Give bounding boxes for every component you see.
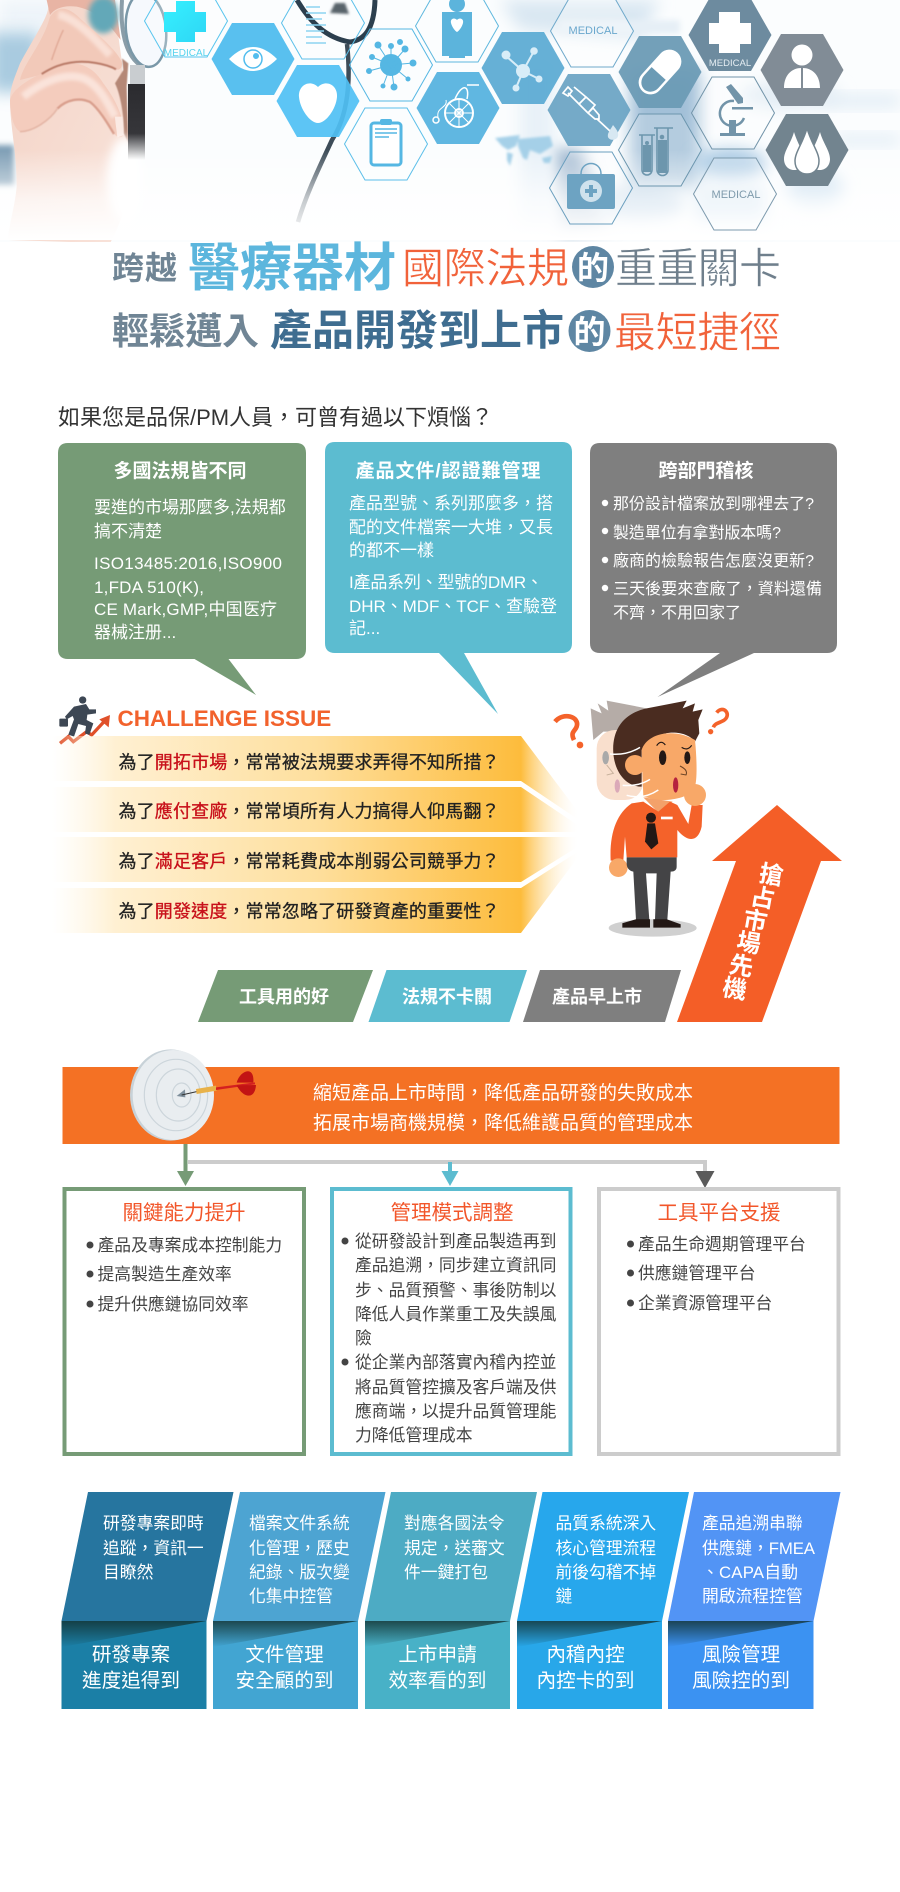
section heading: worries: 如果您是品保/PM人員，可曾有過以下煩惱？: [58, 405, 493, 430]
panel: internal audit column: 前後勾稽不掉: [556, 1563, 656, 1582]
banner: customers: [52, 837, 579, 882]
panel: risk management column: 供應鏈，FMEA: [702, 1538, 816, 1558]
banner: audit: [52, 787, 579, 832]
panel: document management column: 安全顧的到: [236, 1670, 333, 1692]
panel: market submission column: 上市申請: [398, 1644, 477, 1666]
panel: document management column: 化集中控管: [249, 1587, 333, 1606]
hexagon: medical outline: MEDICAL: [569, 25, 617, 37]
panel: project progress column: 目瞭然: [103, 1563, 154, 1582]
hexagon: molecule: [482, 32, 564, 104]
panel: speech bubble documents: DHR、MDF、TCF、查驗登: [349, 597, 557, 616]
panel: internal audit column: 內稽內控: [546, 1644, 625, 1666]
hexagon: drops: [766, 114, 848, 186]
title line 2: 輕鬆邁入: [112, 311, 259, 352]
panel: risk management column: 、CAPA自動: [702, 1563, 798, 1582]
panel: management mode: 將品質管控擴及客戶端及供: [355, 1378, 557, 1397]
panel: speech bubble documents: 產品文件/認證難管理: [356, 459, 540, 482]
arrow: capture market first: 搶占市場先機: [720, 859, 785, 1005]
title line 1: 國際法規: [402, 245, 569, 292]
panel: management mode: 降低人員作業重工及失誤風: [355, 1305, 557, 1324]
heading: challenge issue: CHALLENGE ISSUE: [118, 706, 331, 731]
panel: project progress column: 研發專案即時: [103, 1514, 204, 1533]
panel: internal audit column: 鏈: [556, 1587, 572, 1606]
panel: management mode: [332, 1189, 570, 1454]
hexagon icon cluster: [144, 0, 848, 230]
panel: speech bubble regulations: 要進的市場那麼多,法規都: [94, 498, 286, 517]
tag: good tools: [198, 970, 373, 1022]
panel: speech bubble regulations: 器械注册...: [94, 623, 176, 642]
panel: key capabilities: 產品及專案成本控制能力: [98, 1236, 282, 1255]
arrow: to capability box: [177, 1144, 194, 1186]
panel: speech bubble regulations: 多國法規皆不同: [113, 460, 247, 482]
panel: speech bubble documents: [325, 442, 572, 714]
panel: management mode: 應商端，以提升品質管理能: [355, 1401, 557, 1421]
hexagon: medical cross outline: [144, 0, 228, 59]
hexagon: syringe: [548, 74, 630, 146]
panel: key capabilities: [64, 1189, 304, 1454]
panel: market submission column: 對應各國法令: [404, 1513, 505, 1533]
panel: key capabilities: 關鍵能力提升: [122, 1202, 246, 1224]
hexagon: wheelchair: [416, 72, 500, 144]
hero bottom fade: [0, 150, 900, 240]
hexagon: test tubes: [618, 114, 702, 186]
panel: speech bubble documents: 的都不一樣: [349, 541, 434, 560]
hexagon: medical cross filled: MEDICAL: [709, 58, 751, 69]
icon: world map: [495, 135, 553, 166]
panel: speech bubble audit: 不齊，不用回家了: [613, 604, 741, 622]
panel: key capabilities: 提升供應鏈協同效率: [98, 1294, 249, 1314]
banner: market: 為了開拓市場，常常被法規要求弄得不知所措？: [118, 752, 500, 772]
panel: project progress column: 進度追得到: [82, 1670, 180, 1692]
arrow: to management box: [442, 1162, 458, 1186]
tag: early launch: [523, 970, 681, 1022]
panel: speech bubble audit: 那份設計檔案放到哪裡去了?: [613, 495, 814, 513]
hexagon: medical outline lower: [694, 158, 776, 230]
panel: risk management column: [668, 1492, 840, 1709]
title line 1: 重重關卡: [615, 245, 781, 292]
tag: regulations: 法規不卡關: [402, 987, 492, 1007]
title line 2: 最短捷徑: [614, 309, 781, 356]
banner: market: [52, 736, 579, 820]
icon: question mark right: [708, 709, 727, 734]
panel: market submission column: 件一鍵打包: [404, 1563, 488, 1582]
panel: internal audit column: 核心管理流程: [556, 1539, 656, 1558]
panel: document management column: [213, 1492, 386, 1709]
hexagon: medical outline lower: MEDICAL: [712, 189, 760, 201]
icon: dartboard: [130, 1049, 256, 1141]
panel: speech bubble documents: 記...: [349, 619, 380, 638]
icon: 的 circle second: 的: [573, 314, 606, 350]
banner: customers: 為了滿足客戶，常常耗費成本削弱公司競爭力？: [118, 852, 500, 872]
panel: management mode: 力降低管理成本: [355, 1426, 473, 1445]
hexagon: medical cross outline: MEDICAL: [164, 48, 209, 59]
hexagon: pill: [618, 36, 702, 108]
panel: tool platform: 產品生命週期管理平台: [638, 1235, 806, 1254]
panel: management mode: 從企業內部落實內稽內控並: [355, 1353, 556, 1372]
panel: management mode: 從研發設計到產品製造再到: [355, 1232, 556, 1251]
title line 2: 產品開發到上市: [270, 307, 564, 354]
panel: tool platform: 供應鏈管理平台: [638, 1263, 755, 1283]
panel: speech bubble regulations: ISO13485:2016,ISO900: [94, 554, 282, 573]
panel: risk management column: 風險管理: [702, 1644, 780, 1666]
panel: document management column: 檔案文件系統: [249, 1514, 350, 1533]
hand: [10, 0, 129, 242]
hexagon: report outline: [282, 0, 364, 59]
icon: question mark left: [555, 716, 583, 748]
hexagon: medical bag: [550, 152, 632, 224]
panel: market submission column: 規定，送審文: [404, 1539, 505, 1558]
panel: speech bubble regulations: 搞不清楚: [94, 522, 162, 541]
hero photo background: doctor hand and coat: [0, 0, 900, 250]
panel: risk management column: 開啟流程控管: [702, 1587, 803, 1606]
arrow: to tool box: [696, 1171, 714, 1188]
panel: speech bubble documents: 配的文件檔案一大堆，又長: [349, 518, 553, 537]
icon: 的 circle: 的: [577, 250, 609, 286]
hexagon: medical outline: [550, 0, 634, 67]
panel: speech bubble audit: 製造單位有拿對版本嗎?: [613, 523, 781, 542]
panel: speech bubble audit: 跨部門稽核: [658, 459, 754, 482]
banner: development: [52, 851, 579, 933]
panel: internal audit column: 品質系統深入: [556, 1514, 656, 1533]
banner: development: 為了開發速度，常常忽略了研發資產的重要性？: [118, 902, 500, 922]
panel: speech bubble regulations: 1,FDA 510(K),: [94, 578, 204, 597]
icon: climbing businessman: [59, 696, 110, 743]
panel: speech bubble regulations: CE Mark,GMP,中国医疗: [94, 600, 277, 619]
panel: internal audit column: 內控卡的到: [537, 1670, 634, 1692]
panel: project progress column: 研發專案: [92, 1644, 170, 1666]
panel: project progress column: [62, 1492, 234, 1709]
hexagon: clipboard: [344, 108, 428, 180]
banner: audit: 為了應付查廠，常常頃所有人力搞得人仰馬翻？: [118, 800, 500, 822]
stethoscope: [122, 0, 375, 222]
panel: speech bubble regulations: [58, 443, 306, 695]
panel: speech bubble audit: 廠商的檢驗報告怎麼沒更新?: [613, 551, 814, 570]
icon: confused man figure: [555, 701, 727, 937]
tag: regulations: [368, 970, 527, 1022]
panel: document management column: 化管理，歷史: [249, 1539, 350, 1558]
panel: market submission column: 效率看的到: [389, 1670, 486, 1692]
tag: early launch: 產品早上市: [552, 986, 642, 1007]
hexagon: person with heart: [416, 0, 498, 62]
panel: orange goal banner: 拓展市場商機規模，降低維護品質的管理成本: [313, 1112, 693, 1134]
icon: 的 circle: [572, 246, 614, 288]
panel: document management column: 紀錄、版次變: [249, 1563, 350, 1582]
hexagon: virus: [350, 29, 432, 101]
panel: speech bubble audit: 三天後要來查廠了，資料還備: [613, 579, 822, 598]
panel: orange goal banner: [62, 1067, 840, 1144]
title line 1: 醫療器材: [188, 240, 396, 298]
chart: four converging challenge banners: [52, 736, 579, 933]
panel: risk management column: 風險控的到: [692, 1670, 790, 1692]
connector arrows: [177, 1144, 714, 1188]
hexagon: microscope: [692, 77, 774, 149]
panel: tool platform: 企業資源管理平台: [638, 1294, 772, 1313]
panel: document management column: 文件管理: [245, 1644, 324, 1666]
panel: key capabilities: 提高製造生產效率: [98, 1265, 232, 1284]
hexagon: person: [760, 34, 844, 106]
hexagon: medical cross filled: [688, 0, 772, 71]
panel: risk management column: 產品追溯串聯: [702, 1514, 803, 1533]
panel: project progress column: 追蹤，資訊一: [103, 1539, 204, 1558]
title line 2: [112, 307, 781, 356]
panel: market submission column: [365, 1492, 537, 1709]
panel: speech bubble documents: I產品系列、型號的DMR、: [349, 573, 543, 592]
icon: 的 circle second: [568, 310, 610, 352]
panel: management mode: 險: [355, 1329, 372, 1348]
tag: good tools: 工具用的好: [239, 987, 329, 1007]
panel: internal audit column: [517, 1492, 689, 1709]
panel: orange goal banner: 縮短產品上市時間，降低產品研發的失敗成本: [313, 1082, 693, 1104]
hexagon: eye: [212, 23, 294, 95]
panel: tool platform: 工具平台支援: [658, 1202, 780, 1224]
panel: management mode: 產品追溯，同步建立資訊同: [355, 1256, 556, 1275]
panel: management mode: 管理模式調整: [390, 1202, 514, 1224]
panel: management mode: 步、品質預警、事後防制以: [355, 1281, 557, 1300]
title line 1: [112, 240, 781, 298]
arrow: capture market first: [677, 805, 842, 1022]
title line 1: 跨越: [112, 250, 177, 286]
panel: tool platform: [599, 1189, 838, 1454]
panel: speech bubble documents: 產品型號、系列那麼多，搭: [349, 494, 553, 513]
hexagon: heart: [276, 65, 360, 137]
panel: speech bubble audit: [590, 443, 837, 697]
